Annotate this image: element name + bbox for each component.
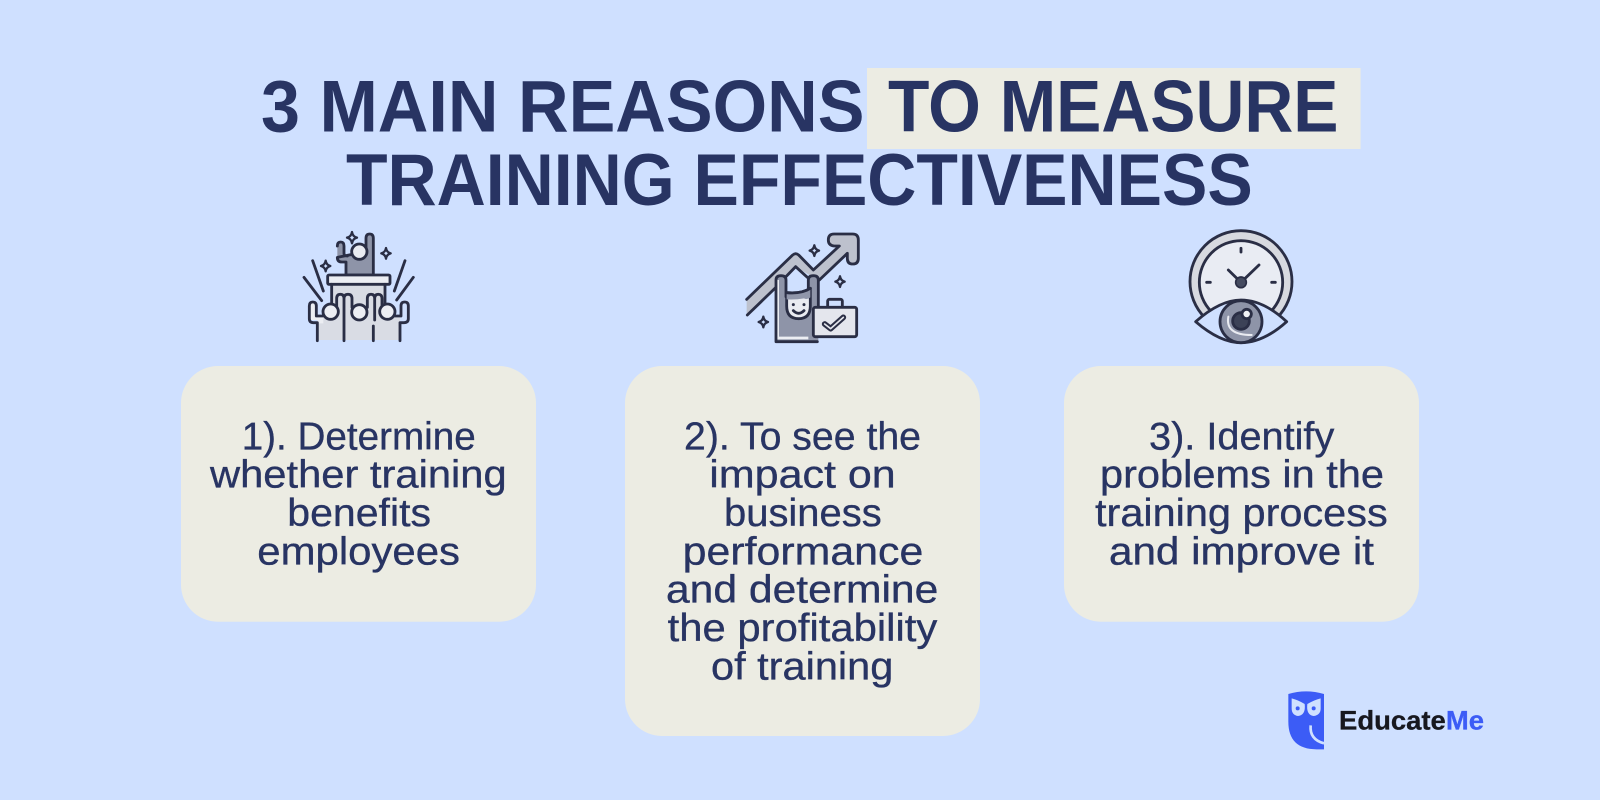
card text: employees: [257, 530, 460, 573]
card text: [1095, 415, 1388, 573]
card text: [209, 415, 507, 573]
panel: reason 1: [181, 366, 536, 622]
logo: EducateMe: [1288, 691, 1484, 749]
card text: problems in the: [1100, 454, 1384, 497]
card text: 3). Identify: [1149, 415, 1335, 458]
card text: the profitability: [668, 607, 938, 650]
card text: benefits: [287, 492, 431, 535]
title highlight: [867, 68, 1361, 149]
card text: business: [724, 492, 882, 535]
title line 2: TRAINING EFFECTIVENESS: [346, 140, 1253, 221]
card text: impact on: [709, 454, 896, 497]
icon: presenter and cheering audience: [304, 232, 413, 341]
card text: and determine: [666, 569, 938, 612]
icon: owl: [1288, 691, 1324, 749]
card text: of training: [711, 645, 893, 688]
logo wordmark: EducateMe: [1339, 705, 1484, 735]
card background: [181, 366, 536, 622]
card text: 1). Determine: [242, 415, 476, 458]
title line 1 start: 3 MAIN REASONS: [261, 67, 864, 148]
title: [261, 67, 1361, 221]
panel: reason 2: [625, 366, 980, 736]
panel: reason 3: [1064, 366, 1419, 622]
card text: 2). To see the: [684, 415, 921, 458]
card text: training process: [1095, 492, 1388, 535]
card background: [1064, 366, 1419, 622]
card text: performance: [683, 530, 923, 573]
icon: clock and eye: [1190, 231, 1292, 343]
title line 1 end: TO MEASURE: [888, 67, 1338, 148]
card text: whether training: [209, 454, 507, 497]
card background: [625, 366, 980, 736]
card text: and improve it: [1109, 530, 1374, 573]
icon: growth arrow with employee and briefcase: [747, 234, 858, 342]
card text: [666, 415, 938, 688]
